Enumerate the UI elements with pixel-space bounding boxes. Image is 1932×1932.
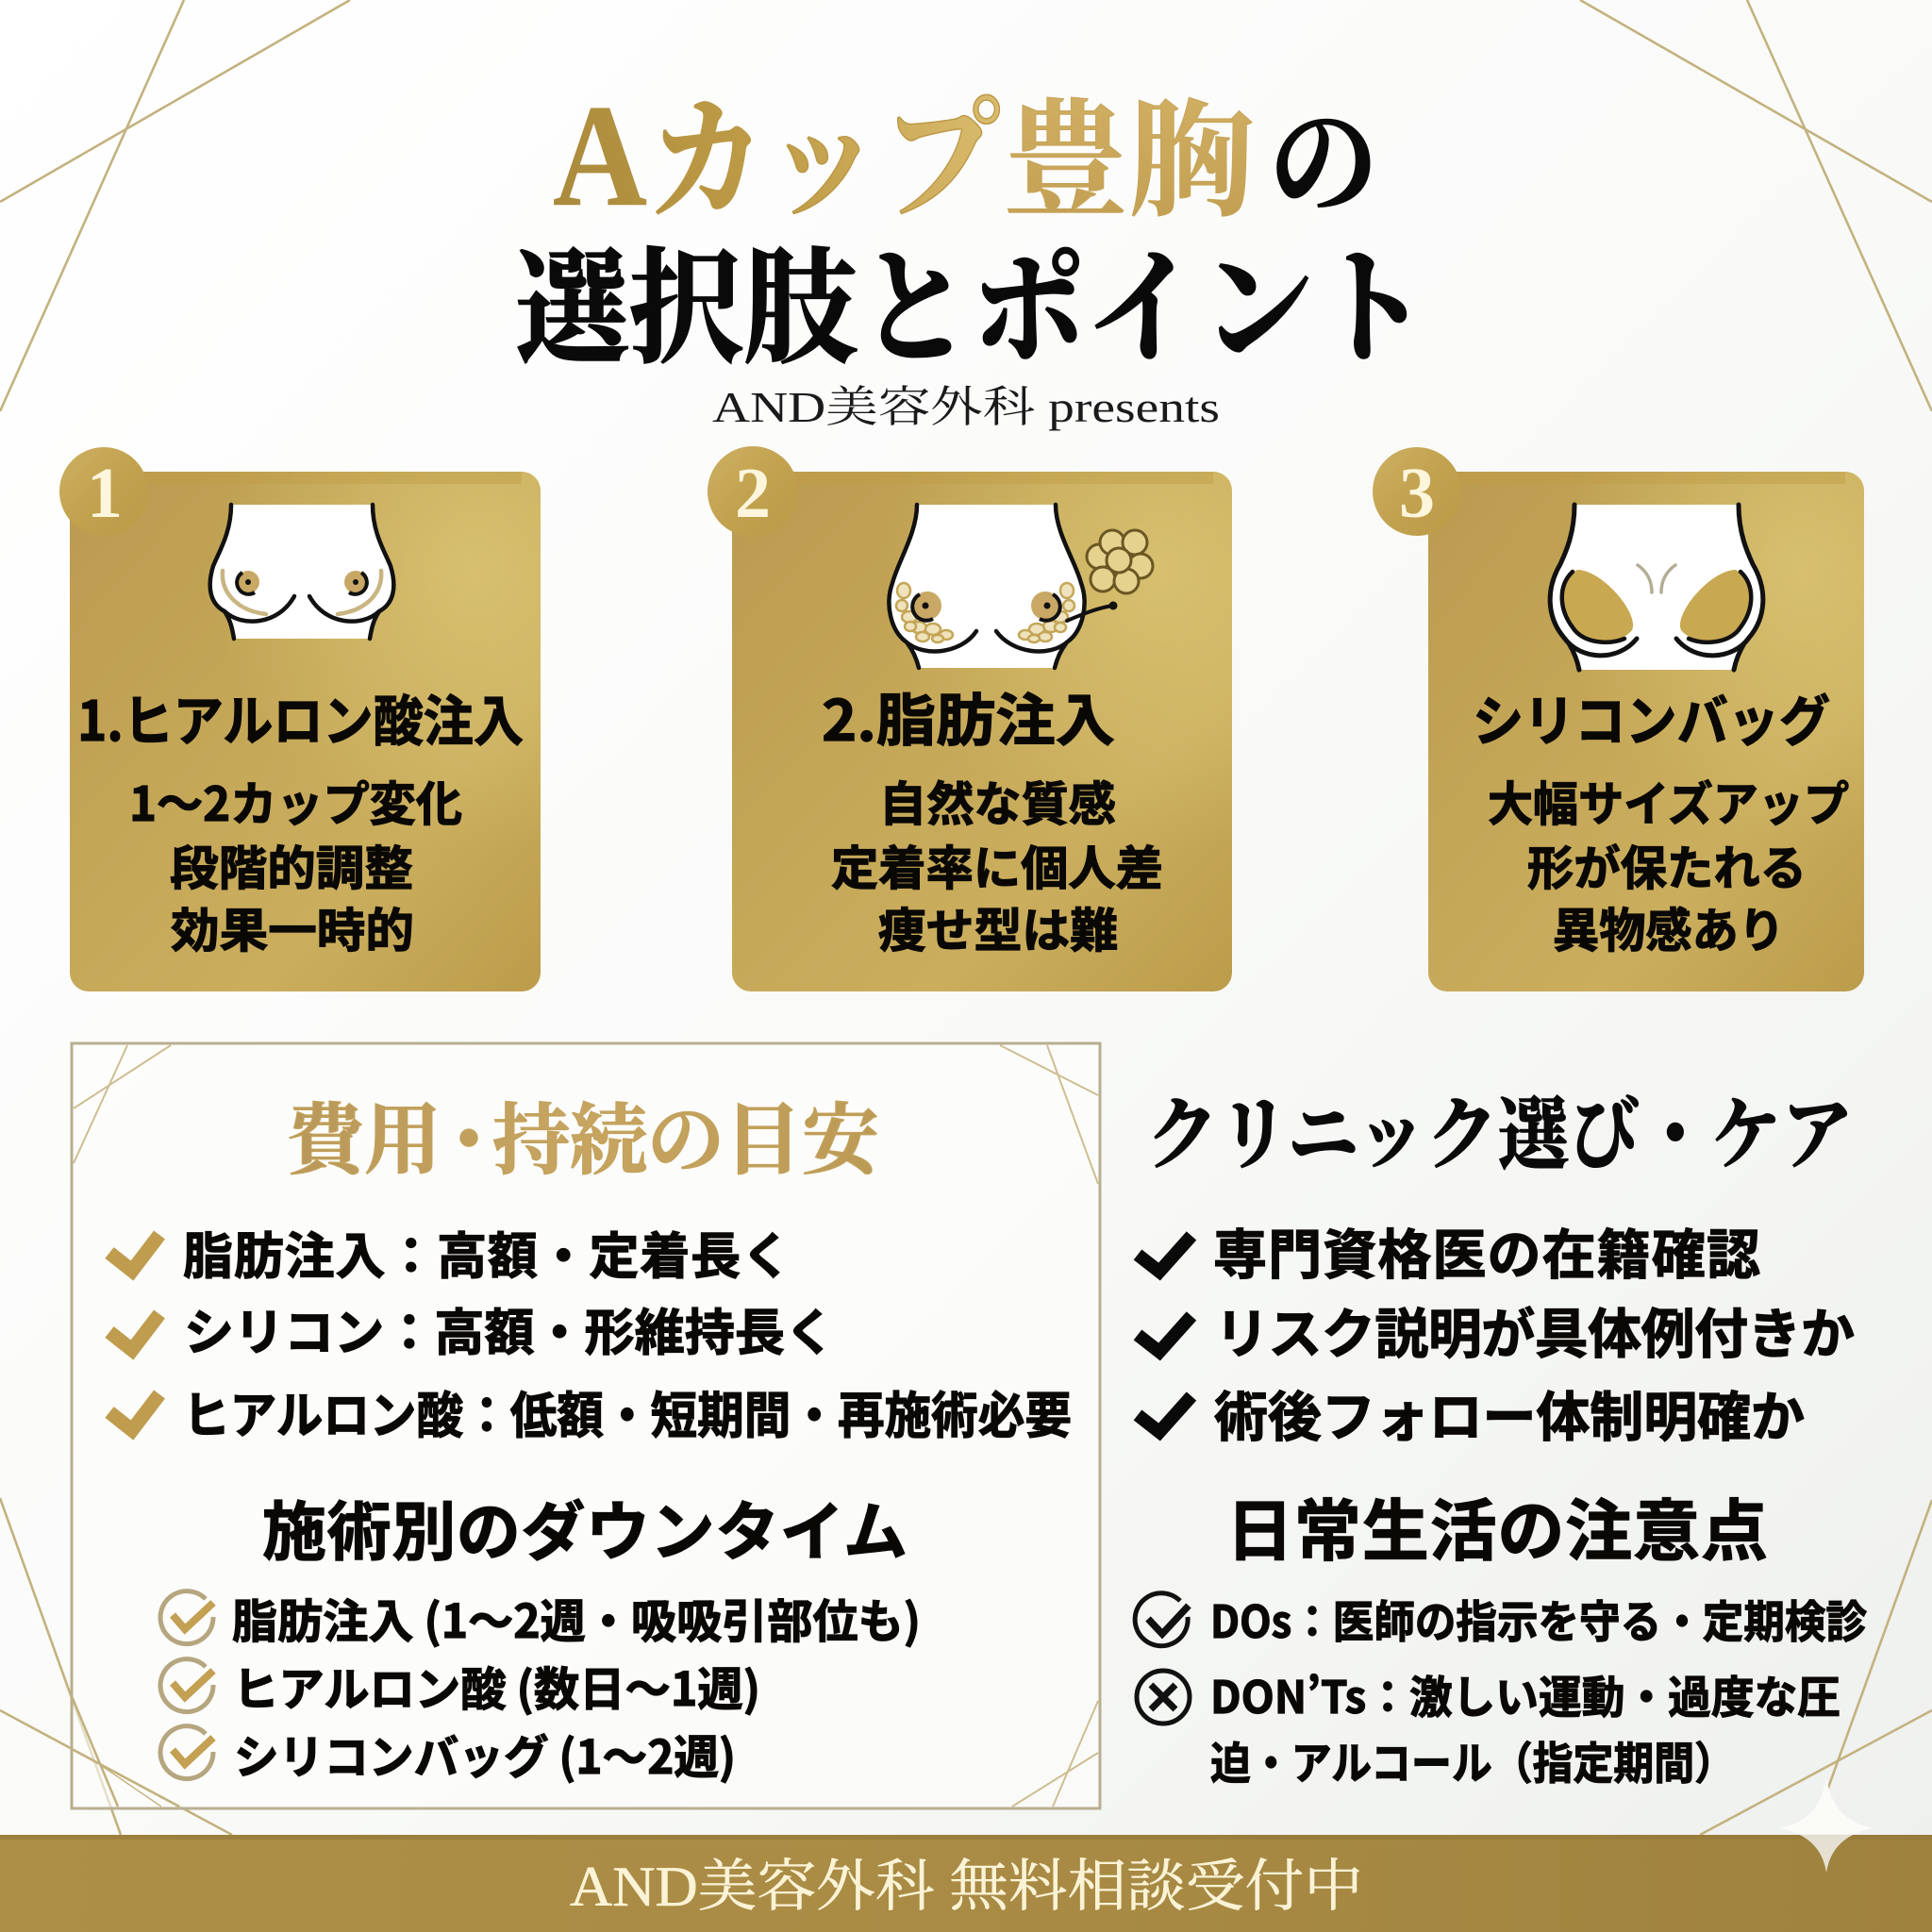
subtitle: AND美容外科 presents xyxy=(712,383,1220,431)
cost checklist xyxy=(109,1217,1072,1448)
footer band xyxy=(0,1835,1932,1932)
card 1 text: 効果一時的 xyxy=(171,893,414,961)
badge 1 xyxy=(59,447,148,536)
icon: torso with fat cells xyxy=(889,505,1153,668)
heading: daily life notes: 日常生活の注意点 xyxy=(1226,1478,1768,1574)
cost checklist: 脂肪注入：高額・定着長く xyxy=(183,1217,791,1289)
panel: hyaluronic acid card xyxy=(59,447,541,991)
clinic checklist: 専門資格医の在籍確認 xyxy=(1213,1212,1760,1290)
card 2 text: 痩せ型は難 xyxy=(878,893,1118,961)
icon: do xyxy=(1135,1593,1189,1646)
badge 2 xyxy=(708,446,798,537)
card 3 heading: シリコンバッグ xyxy=(1473,677,1830,757)
cost checklist: シリコン：高額・形維持長く xyxy=(184,1293,835,1365)
card 2 text: 定着率に個人差 xyxy=(831,831,1163,899)
card 3 text: 大幅サイズアップ xyxy=(1488,767,1849,835)
do and don't list: 迫・アルコール（指定期間） xyxy=(1210,1727,1735,1792)
clinic checklist: リスク説明が具体例付きか xyxy=(1215,1291,1855,1369)
panel: fat injection card xyxy=(708,446,1232,991)
downtime list xyxy=(160,1585,921,1788)
card 3 text xyxy=(1488,767,1849,961)
downtime list: シリコンバッグ (1〜2週) xyxy=(234,1721,736,1788)
title: の xyxy=(1269,100,1378,231)
badge 3: 3 xyxy=(1399,454,1435,533)
title: 選択肢とポイント xyxy=(515,241,1428,379)
icon: torso with implants xyxy=(1550,505,1763,670)
card 2 heading: 2.脂肪注入 xyxy=(822,675,1115,758)
title: 豊胸 xyxy=(1003,92,1255,232)
footer text: AND美容外科 無料相談受付中 xyxy=(570,1856,1363,1918)
downtime list: ヒアルロン酸 (数日〜1週) xyxy=(233,1653,760,1720)
card 1 text: 段階的調整 xyxy=(170,831,413,899)
card 3 text: 形が保たれる xyxy=(1527,831,1807,899)
heading: cost and duration: 費用・持続の目安 xyxy=(287,1098,879,1184)
do and don't list: DON’Ts：激しい運動・過度な圧 xyxy=(1210,1661,1840,1726)
card 3 text: 異物感あり xyxy=(1553,893,1785,961)
cost checklist: ヒアルロン酸：低額・短期間・再施術必要 xyxy=(183,1376,1072,1448)
title: カップ xyxy=(647,90,1000,236)
icon: don't xyxy=(1137,1671,1190,1724)
card 1 text: 1〜2カップ変化 xyxy=(129,767,462,835)
badge 2: 2 xyxy=(735,454,771,533)
do and don't list xyxy=(1135,1586,1867,1792)
card 1 text xyxy=(129,767,462,961)
card 2 text: 自然な質感 xyxy=(879,767,1116,835)
icon: torso natural xyxy=(210,505,393,639)
panel: silicone bag card xyxy=(1373,447,1864,991)
card 1 heading: 1.ヒアルロン酸注入 xyxy=(77,677,524,757)
clinic checklist xyxy=(1138,1212,1855,1452)
clinic checklist: 術後フォロー体制明確か xyxy=(1214,1374,1805,1452)
badge 1: 1 xyxy=(87,454,123,533)
title: A xyxy=(553,75,647,237)
card 2 text xyxy=(831,767,1163,961)
heading: downtime: 施術別のダウンタイム xyxy=(262,1480,908,1574)
do and don't list: DOs：医師の指示を守る・定期検診 xyxy=(1210,1586,1867,1651)
icon: sparkle star xyxy=(1779,1776,1874,1873)
title xyxy=(515,75,1428,379)
badge 3 xyxy=(1373,447,1461,536)
downtime list: 脂肪注入 (1〜2週・吸吸引部位も) xyxy=(232,1585,921,1652)
heading: clinic selection and care: クリニック選び・ケア xyxy=(1147,1092,1853,1180)
panel: cost and downtime xyxy=(72,1043,1100,1808)
